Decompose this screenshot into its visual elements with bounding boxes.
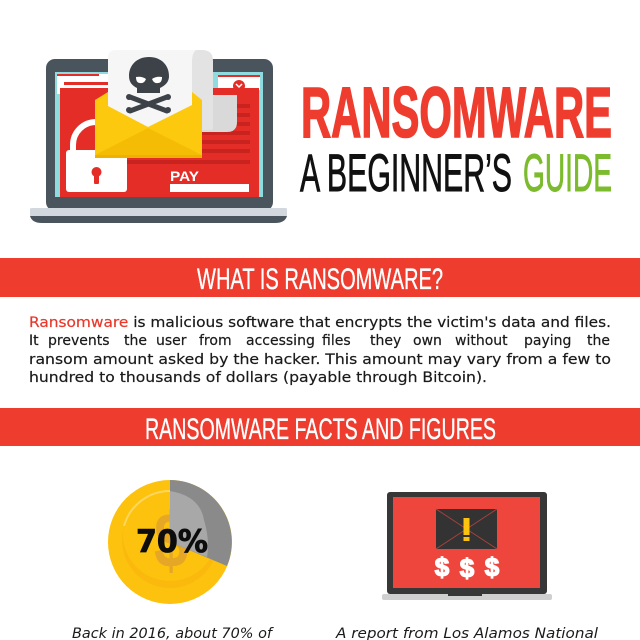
coin highlight: [124, 491, 170, 526]
title: [300, 74, 612, 203]
chart: 70% coin pie: [108, 480, 232, 604]
illustration: laptop with ransomware envelope: [30, 50, 287, 223]
definition paragraph: from: [199, 333, 232, 349]
pay button: [170, 184, 249, 192]
laptop lid: [46, 59, 273, 211]
definition paragraph: without: [455, 333, 508, 349]
padlock icon: [66, 122, 127, 192]
left browser window: [57, 74, 117, 94]
right browser window: [218, 75, 260, 90]
definition paragraph: they: [370, 333, 401, 349]
laptop base: [382, 594, 552, 600]
coin inner face: [123, 487, 217, 581]
definition paragraph: the: [124, 333, 147, 349]
dollar signs: $: [485, 552, 500, 582]
grey inner slice: [170, 491, 208, 557]
laptop screen: [393, 497, 540, 588]
section banner: what is ransomware: [0, 258, 640, 297]
icon: laptop with alert and dollars: [382, 492, 552, 600]
grey curled note: [190, 95, 237, 132]
laptop frame: [387, 492, 547, 594]
definition paragraph: ransom amount asked by the hacker. This amount may vary from a few to: [29, 352, 611, 368]
definition paragraph: own: [413, 333, 442, 349]
PAY label: PAY: [170, 168, 200, 184]
definition paragraph: [29, 315, 611, 386]
envelope with alert: [436, 509, 497, 549]
paper scroll: [108, 50, 213, 132]
definition paragraph: the: [587, 333, 610, 349]
coin yellow slice: [108, 480, 232, 604]
section banner: what is ransomware: WHAT IS RANSOMWARE?: [197, 263, 443, 296]
laptop base: [30, 208, 287, 223]
notch: [448, 594, 482, 596]
dollar signs: [435, 552, 500, 583]
skull and crossbones: [126, 57, 171, 113]
definition paragraph: files: [322, 333, 351, 349]
definition paragraph: It: [29, 333, 39, 349]
percentage label: 70%: [136, 524, 208, 560]
ransom note text lines: [127, 104, 250, 164]
definition paragraph: prevents: [48, 333, 110, 349]
dollar glyph on coin: $: [154, 496, 188, 584]
definition paragraph: accessing: [246, 333, 315, 349]
definition paragraph: paying: [524, 333, 571, 349]
close button: [233, 80, 245, 92]
yellow envelope: [95, 92, 202, 158]
definition paragraph: Ransomware is malicious software that encrypts the victim's data and files.: [29, 315, 611, 331]
red ransom window: [60, 88, 259, 197]
section banner: facts and figures: [0, 408, 640, 446]
coin lower shading: [122, 492, 218, 588]
definition paragraph: user: [156, 333, 187, 349]
grey 30% slice: [170, 480, 232, 566]
dollar signs: $: [435, 552, 450, 582]
dollar signs: $: [460, 553, 475, 583]
laptop screen: [55, 72, 263, 197]
definition paragraph: hundred to thousands of dollars (payable through Bitcoin).: [29, 370, 487, 386]
